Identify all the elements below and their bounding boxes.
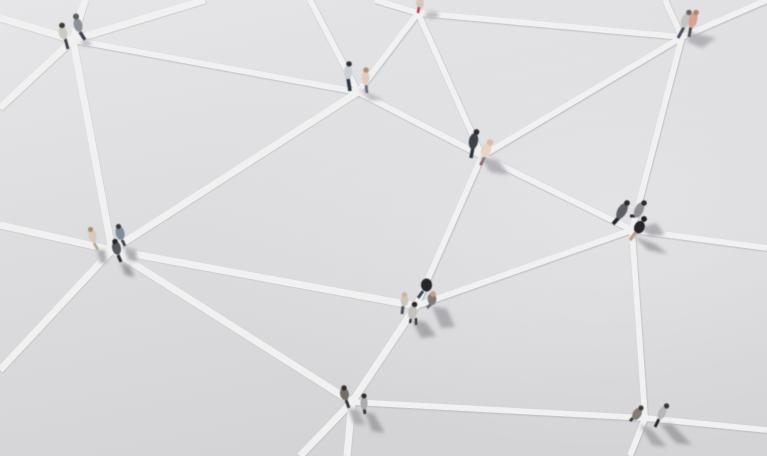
people group: top left — [57, 14, 91, 49]
people group: bottom right — [630, 403, 692, 447]
people group: bottom centre — [339, 385, 385, 433]
people group: top centre — [416, 0, 439, 18]
people group: left — [87, 224, 137, 277]
people group: centre bottom — [401, 278, 455, 338]
people group: upper centre — [344, 61, 384, 100]
people group: top right — [678, 10, 716, 48]
people group: centre — [468, 129, 509, 175]
people group: right — [613, 200, 668, 254]
